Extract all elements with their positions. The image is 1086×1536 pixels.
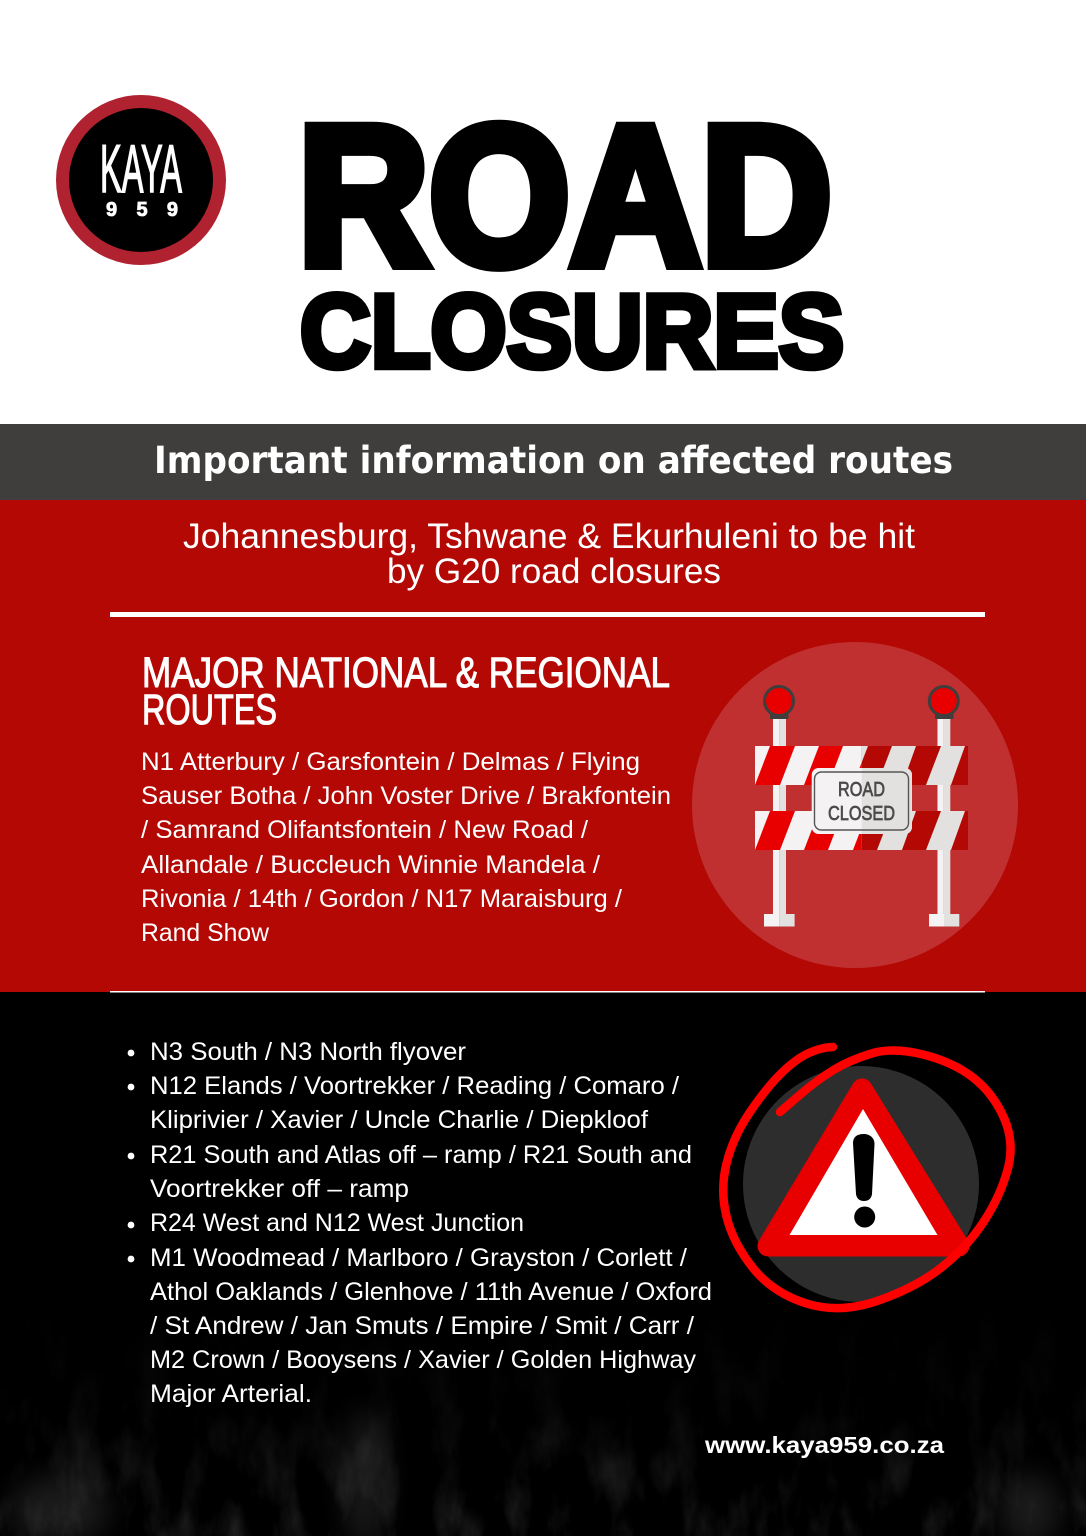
text block: route list: N1 Atterbury / Garsfontein / Delmas / Flying: [141, 748, 640, 776]
banner: important information: Important information on affected routes: [154, 439, 953, 482]
text block: route list: Rand Show: [141, 919, 270, 947]
bullet list: Major Arterial.: [150, 1380, 312, 1408]
panel: red national routes: [0, 500, 1086, 992]
subtitle: [183, 517, 915, 591]
title: ROAD CLOSURES: [298, 85, 844, 390]
icon: warning triangle: [723, 1047, 1011, 1308]
text block: route list: Rivonia / 14th / Gordon / N17 Maraisburg /: [141, 885, 622, 913]
subtitle: Johannesburg, Tshwane & Ekurhuleni to be hit: [183, 517, 915, 556]
heading: major routes: MAJOR NATIONAL & REGIONAL: [142, 649, 670, 697]
text block: route list: [141, 748, 671, 947]
subtitle: by G20 road closures: [387, 552, 721, 591]
banner: important information: [0, 424, 1086, 501]
bullet list: R24 West and N12 West Junction: [150, 1209, 524, 1237]
bullet list: / St Andrew / Jan Smuts / Empire / Smit / Carr /: [150, 1312, 694, 1340]
bullet list: M1 Woodmead / Marlboro / Grayston / Corlett /: [150, 1244, 687, 1272]
sign: road closed: ROAD: [838, 779, 885, 801]
posts: [764, 718, 959, 926]
title: ROAD CLOSURES: CLOSURES: [300, 274, 844, 390]
hand-drawn red ring: [723, 1047, 1011, 1308]
website url: www.kaya959.co.za: [704, 1432, 944, 1458]
logo: Kaya 959: 959: [106, 199, 178, 221]
rock texture: [0, 1409, 1086, 1536]
sign: road closed: [812, 768, 912, 834]
bullet list: Kliprivier / Xavier / Uncle Charlie / Diepkloof: [150, 1106, 648, 1134]
text block: route list: / Samrand Olifantsfontein / New Road /: [141, 816, 588, 844]
heading: major routes: [142, 649, 670, 734]
bullet list: N12 Elands / Voortrekker / Reading / Comaro /: [150, 1072, 679, 1100]
bullet list: Athol Oaklands / Glenhove / 11th Avenue / Oxford: [150, 1278, 712, 1306]
sign: road closed: CLOSED: [828, 803, 895, 825]
logo: Kaya 959: KAYA: [100, 131, 182, 207]
panel: black section: [0, 991, 1086, 1536]
title: ROAD CLOSURES: ROAD: [298, 85, 832, 306]
heading: major routes: ROUTES: [142, 686, 277, 734]
text block: route list: Sauser Botha / John Voster Drive / Brakfontein: [141, 782, 671, 810]
bullet list: Voortrekker off – ramp: [150, 1175, 409, 1203]
striped bars: [755, 746, 990, 850]
bullet list: M2 Crown / Booysens / Xavier / Golden Highway: [150, 1346, 697, 1374]
icon: road closed barrier: [692, 642, 1018, 968]
text block: route list: Allandale / Buccleuch Winnie Mandela /: [141, 851, 600, 879]
logo: Kaya 959: [56, 95, 226, 265]
bullet list: N3 South / N3 North flyover: [150, 1038, 466, 1066]
bullet list: R21 South and Atlas off – ramp / R21 South and: [150, 1141, 692, 1169]
warning lights: [764, 686, 958, 719]
bullet list: [128, 1038, 712, 1408]
